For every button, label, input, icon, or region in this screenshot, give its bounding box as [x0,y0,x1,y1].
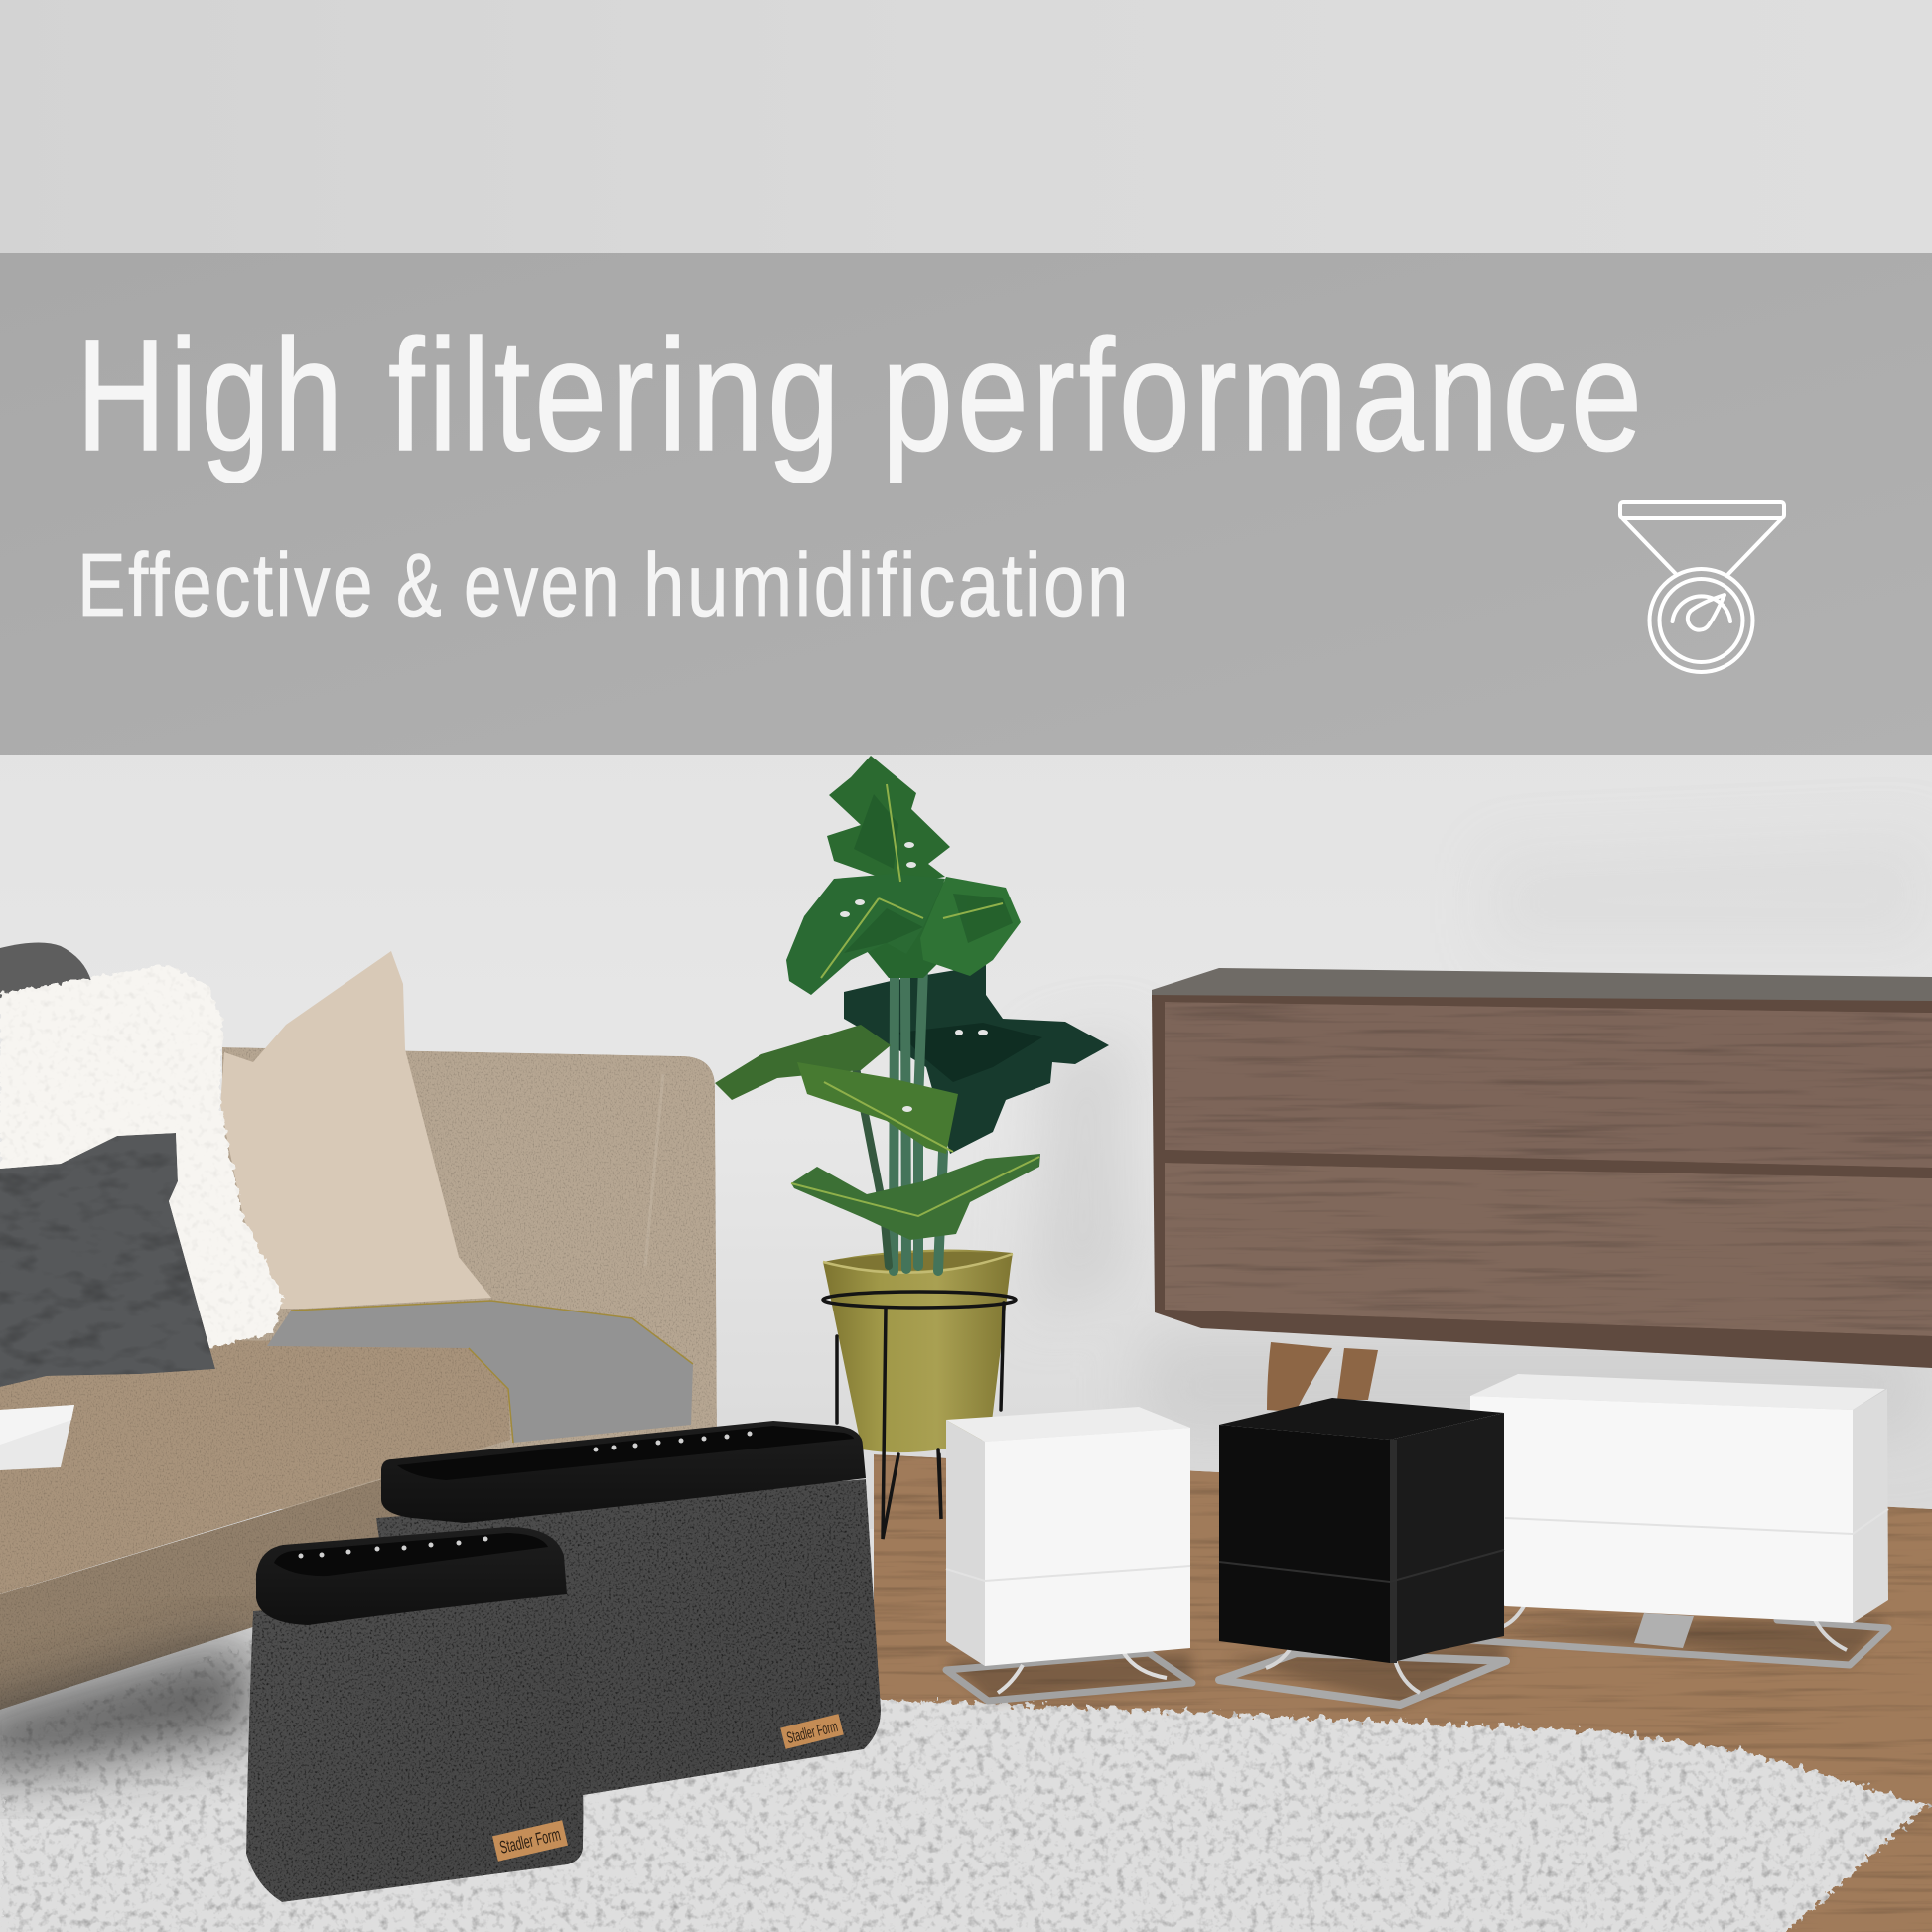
floor [874,1454,1932,1932]
title: performance [882,306,1646,483]
floor shadows under humidifiers [946,1618,1886,1705]
leaf holes [840,842,988,1112]
purifier rim [381,1421,866,1523]
brand label: Stadler Form [498,1824,562,1858]
centre strip [1634,1613,1694,1648]
photo: living room scene [0,735,1932,1932]
purifier rim [256,1527,567,1625]
subtitle [77,536,1131,635]
lower drawer [1165,1163,1932,1336]
sideboard legs [1267,1342,1378,1412]
subtitle: & [396,536,444,635]
leaf shading [844,794,1013,953]
dark leaf shading [898,1023,1042,1082]
beige pillow [220,951,491,1309]
black humidifier [1219,1398,1506,1705]
wall [0,735,1932,1529]
sofa lower front [0,1469,417,1710]
dark velvet pillow [0,1133,215,1387]
plant stand [823,1292,1016,1539]
control icons [298,1537,488,1559]
small air purifier [246,1527,583,1902]
humidifier left face [1219,1425,1390,1663]
humidifier front [985,1428,1190,1666]
sofa arm and back [222,1047,717,1509]
seam [1219,1550,1504,1582]
seam [1505,1509,1888,1534]
centre leaf [844,879,958,978]
humidifier side [1853,1389,1888,1623]
upper drawer [1165,1002,1932,1168]
metal base [946,1653,1192,1701]
arm seam [645,1074,663,1266]
brand label [780,1714,844,1749]
middle front leaf [797,1062,958,1154]
rim opening [397,1426,854,1480]
rug [0,1628,1928,1932]
left leaf [715,1025,891,1100]
title: High [76,306,346,483]
title [76,306,1646,483]
blanket edge [291,1301,693,1443]
subtitle: even [464,536,621,635]
plant pot [823,1250,1013,1452]
support arcs [1499,1606,1847,1650]
control icons [594,1432,753,1451]
heading band [0,253,1932,755]
corner highlight [1390,1440,1397,1663]
book [0,1405,74,1470]
grey blanket [267,1301,693,1443]
sideboard [1152,968,1932,1412]
right leaf [920,877,1021,976]
large white humidifier [1470,1374,1888,1665]
sideboard body [1152,995,1932,1368]
grey back pillow [0,942,91,998]
metal base [1470,1620,1888,1665]
rim opening [274,1533,548,1576]
support arcs [1266,1648,1420,1693]
humidifier top [946,1407,1190,1442]
small white humidifier [946,1407,1192,1701]
subtitle: humidification [643,536,1131,635]
purifier body [376,1479,881,1797]
plant [715,756,1109,1539]
back dark leaves [844,965,1109,1154]
rug foreground fringe [943,1712,1920,1932]
humidifier top [1219,1398,1504,1440]
band background [0,253,1932,755]
title: filtering [388,306,844,483]
subtitle: Effective [77,536,375,635]
leaf veins [791,784,1039,1216]
top wall strip [0,0,1932,253]
purifier body [246,1588,583,1902]
sideboard top [1152,968,1932,1001]
seam [946,1566,1190,1581]
metal base [1219,1653,1506,1705]
large left leaf [786,874,945,995]
icon: medal with gauge [1620,502,1784,672]
white fluffy pillow [0,964,284,1348]
humidifier right face [1390,1413,1504,1663]
top leaf [827,756,950,885]
plant stems [854,968,943,1271]
lower leaf [791,1154,1040,1240]
brand label: Stadler Form [785,1719,840,1747]
support arcs [998,1653,1167,1693]
humidifier left side [946,1420,985,1666]
humidifier front [1470,1396,1853,1623]
large air purifier [376,1421,881,1797]
brand label [492,1820,568,1862]
rug shadow [0,1638,258,1777]
sofa seat cushion [0,1340,510,1594]
wall shadows [1033,834,1932,1440]
sofa [0,942,717,1710]
humidifier top [1470,1374,1885,1410]
